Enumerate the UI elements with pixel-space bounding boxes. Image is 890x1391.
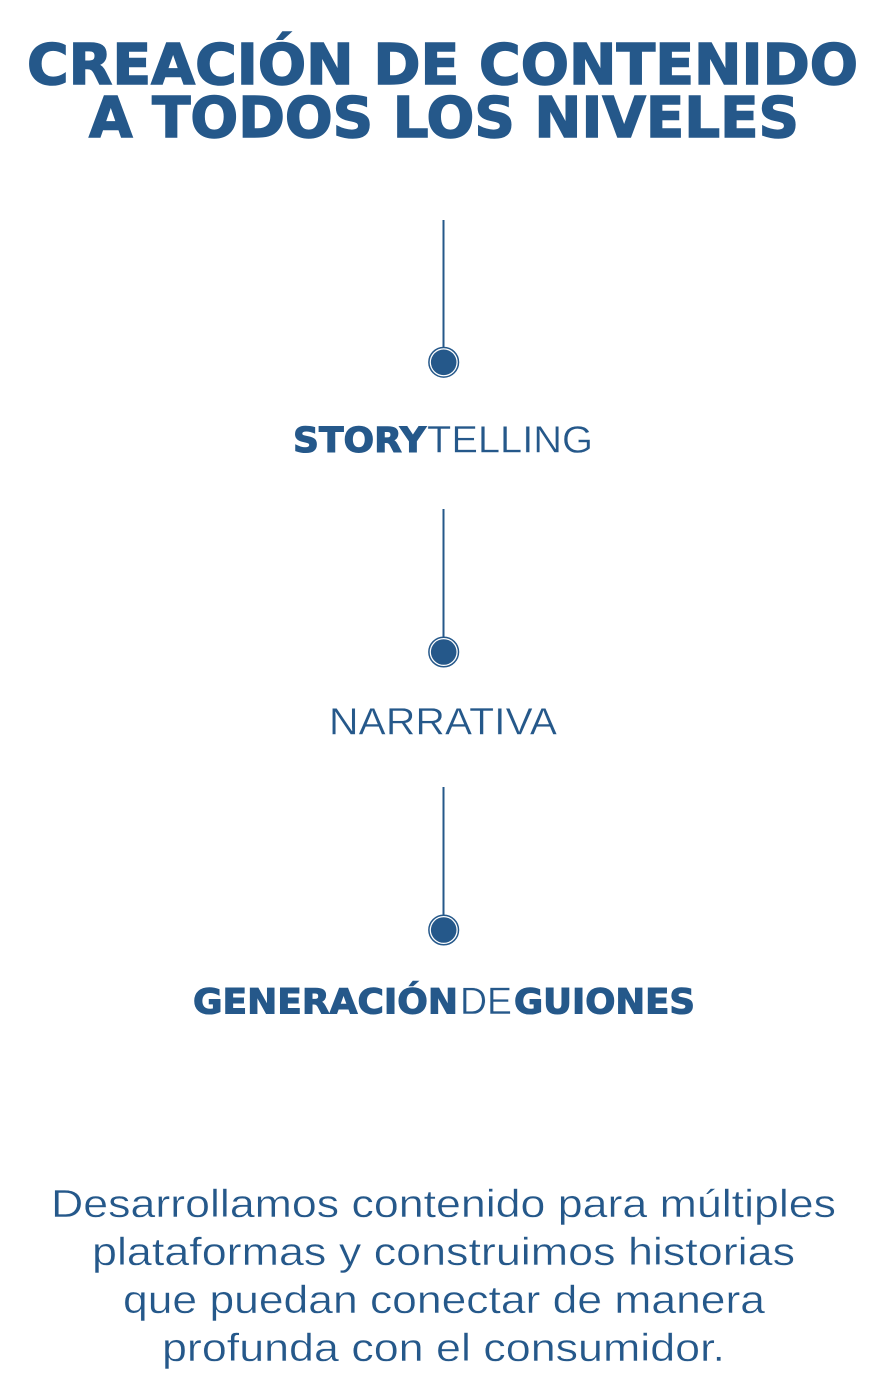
title: [27, 33, 858, 151]
timeline marker: narrativa: [429, 509, 459, 667]
label: storytelling: [293, 420, 593, 462]
label: storytelling: TELLING: [427, 420, 593, 462]
label: generación de guiones: GENERACIÓN: [193, 980, 458, 1022]
description paragraph: profunda con el consumidor.: [162, 1327, 725, 1370]
title: A TODOS LOS NIVELES: [89, 86, 799, 151]
label: narrativa: NARRATIVA: [329, 702, 558, 744]
label: storytelling: STORY: [293, 421, 427, 461]
description paragraph: [51, 1183, 836, 1370]
title: CREACIÓN DE CONTENIDO: [27, 33, 858, 98]
label: generación de guiones: DE: [460, 981, 512, 1023]
description paragraph: que puedan conectar de manera: [123, 1279, 766, 1322]
label: generación de guiones: GUIONES: [514, 982, 695, 1022]
description paragraph: plataformas y construimos historias: [92, 1231, 795, 1274]
timeline marker: generación de guiones: [429, 787, 459, 945]
description paragraph: Desarrollamos contenido para múltiples: [51, 1183, 836, 1226]
timeline marker: storytelling: [429, 220, 459, 377]
label: generación de guiones: [193, 980, 695, 1023]
